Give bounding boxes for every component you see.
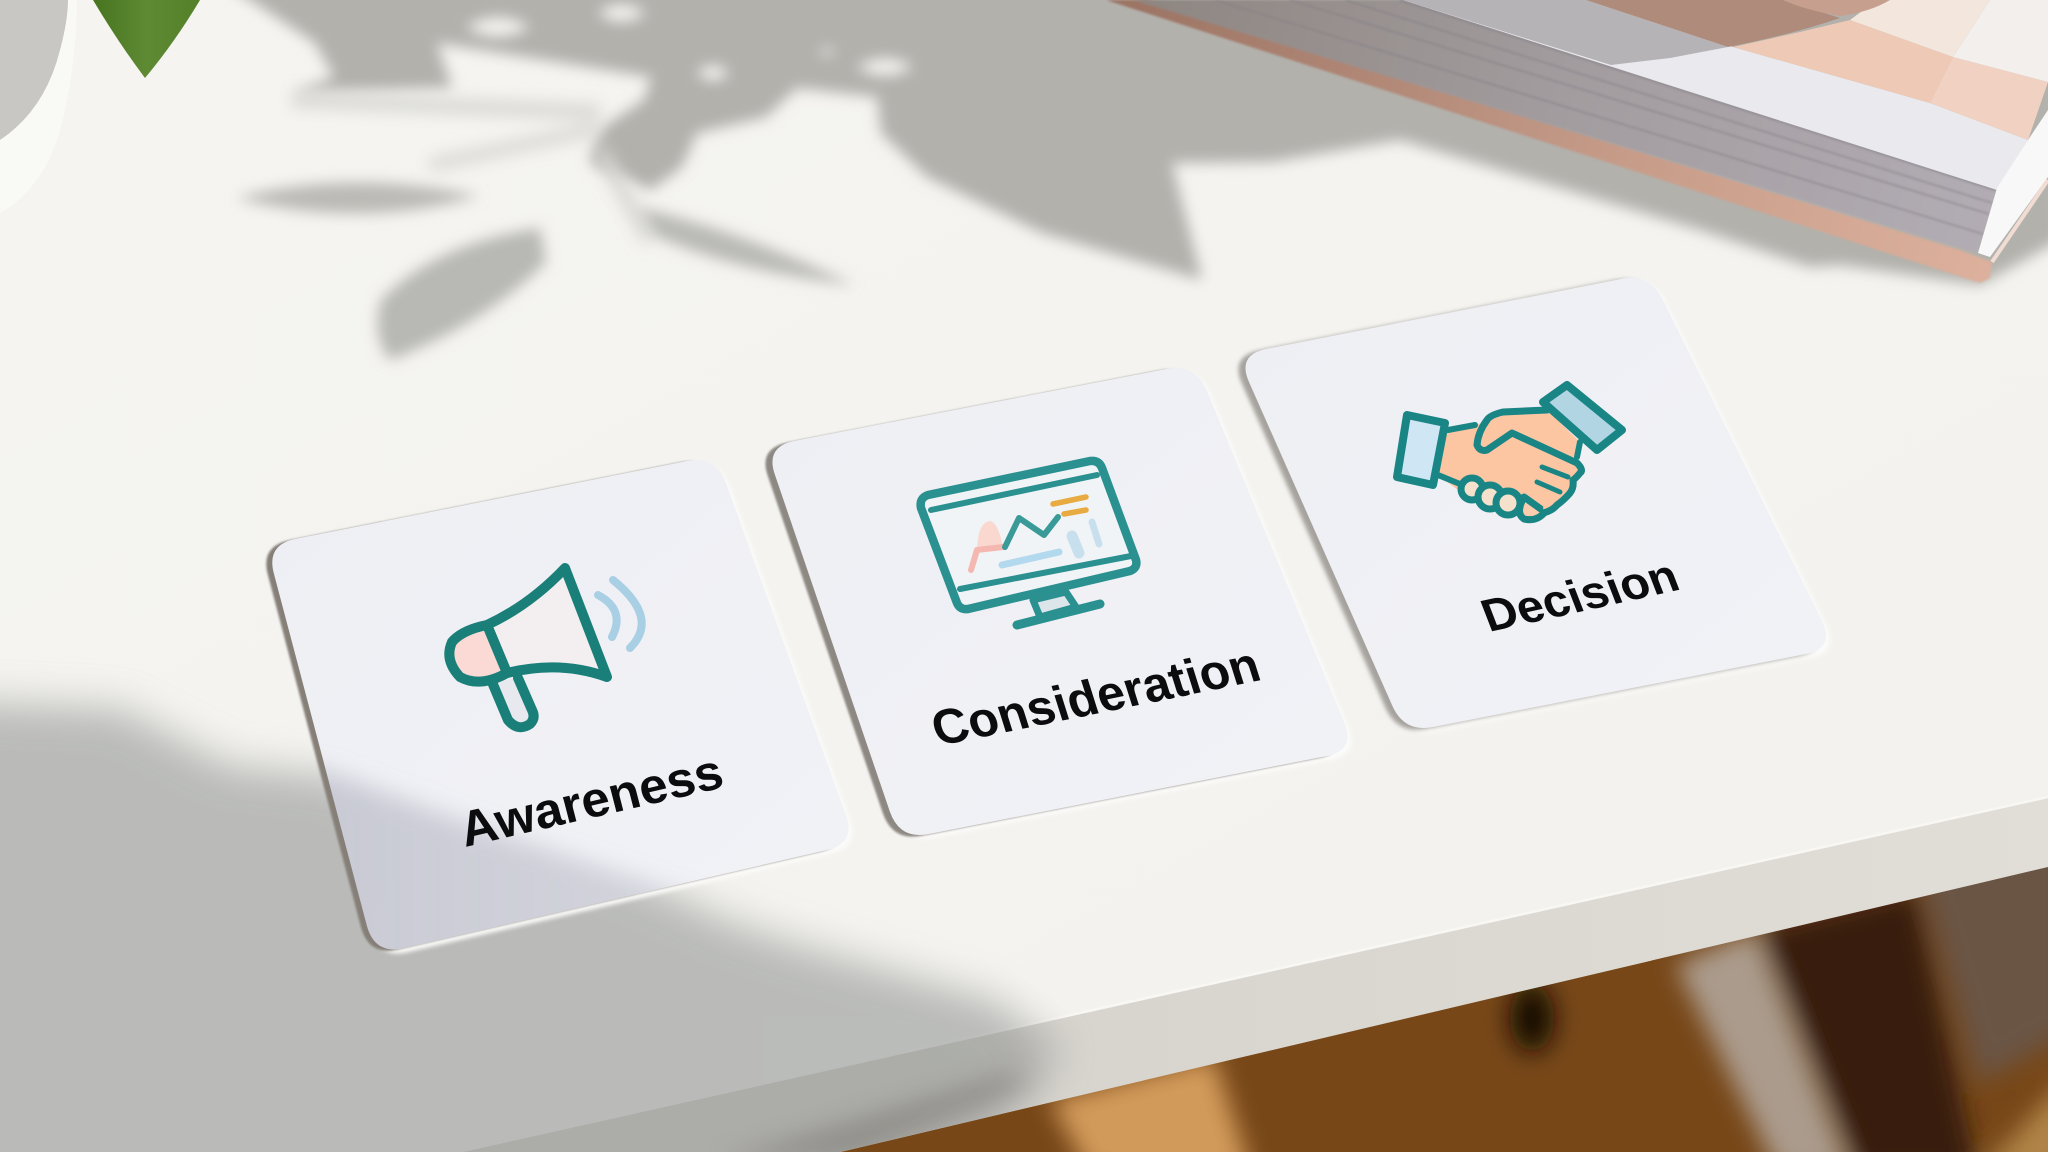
panel: awareness card (264, 460, 850, 956)
card shadow (1238, 280, 1819, 730)
leaf at the top (93, 0, 200, 78)
book: stack of pages with pink cover at the top right (1106, 0, 2048, 283)
object resting on the book (1783, 0, 1890, 16)
hand fill (1438, 410, 1580, 517)
label: Awareness: Awareness (454, 743, 729, 858)
book white corner (1978, 110, 2048, 257)
chart blue bars (1002, 522, 1099, 565)
shadow: third leaf (640, 208, 854, 285)
monitor screen (921, 461, 1136, 609)
panel: consideration card (765, 368, 1352, 839)
label: Decision: Decision (1474, 549, 1686, 641)
book pink outer edge (1992, 180, 2048, 262)
card glow (276, 464, 853, 953)
chart pink area (977, 521, 1003, 550)
book pale pink square (1930, 57, 2048, 140)
shadow: large shadow at the lower left of the desk (0, 700, 1060, 1152)
book cream square (1850, 0, 1990, 57)
chart teal line (1005, 517, 1058, 547)
card glow (776, 372, 1352, 839)
megaphone horn (487, 568, 607, 677)
left cuff (1397, 415, 1445, 485)
book pale corner square (1953, 0, 2048, 82)
finger lines (1537, 467, 1568, 492)
panel: decision card (1238, 278, 1830, 732)
monitor base (1017, 604, 1100, 625)
chart pink line (971, 547, 1003, 570)
book top page (1403, 0, 2028, 190)
book page edges (1133, 0, 1997, 253)
megaphone handle (492, 678, 534, 727)
card shadow (765, 370, 1341, 837)
shadow: first leaf (236, 182, 479, 214)
sound waves (598, 580, 642, 648)
card shadow (266, 461, 843, 951)
monitor lower bar (960, 556, 1131, 589)
thumb and hand outline (1477, 410, 1581, 513)
shadow: faint branch bands (292, 100, 650, 240)
fingers (1461, 478, 1545, 520)
icon: handshake (1397, 385, 1622, 520)
pot rim (0, 0, 77, 213)
book shaded part of top page (1403, 0, 1728, 65)
right cuff (1543, 385, 1622, 450)
wrist lines (1438, 425, 1580, 484)
shadow: second leaf (378, 228, 546, 360)
icon: megaphone (449, 568, 642, 727)
monitor stand (1033, 592, 1076, 617)
shadow: large foliage shadow at the top of the desk (205, 0, 2048, 285)
plant pot at the top left (0, 0, 77, 213)
megaphone back cap (449, 625, 507, 682)
floor: blurred wooden floor below the desk (841, 867, 2048, 1152)
desk front edge (459, 798, 2048, 1152)
card sheet (272, 460, 849, 949)
card sheet (772, 368, 1348, 835)
card glow (1249, 282, 1830, 732)
book cover spine (1106, 0, 1992, 283)
book shaded pink (1586, 0, 1840, 47)
pot interior (0, 0, 68, 140)
icon: monitor with chart (921, 461, 1136, 625)
desk edge highlight (900, 797, 2048, 1053)
shadow falling on the card (324, 762, 674, 950)
chart orange bars (1053, 497, 1086, 514)
book page lines (1215, 0, 1996, 234)
book pink square (1733, 20, 1953, 103)
label: Consideration: Consideration (925, 637, 1267, 756)
monitor upper bar (931, 475, 1097, 510)
card sheet (1245, 278, 1826, 728)
